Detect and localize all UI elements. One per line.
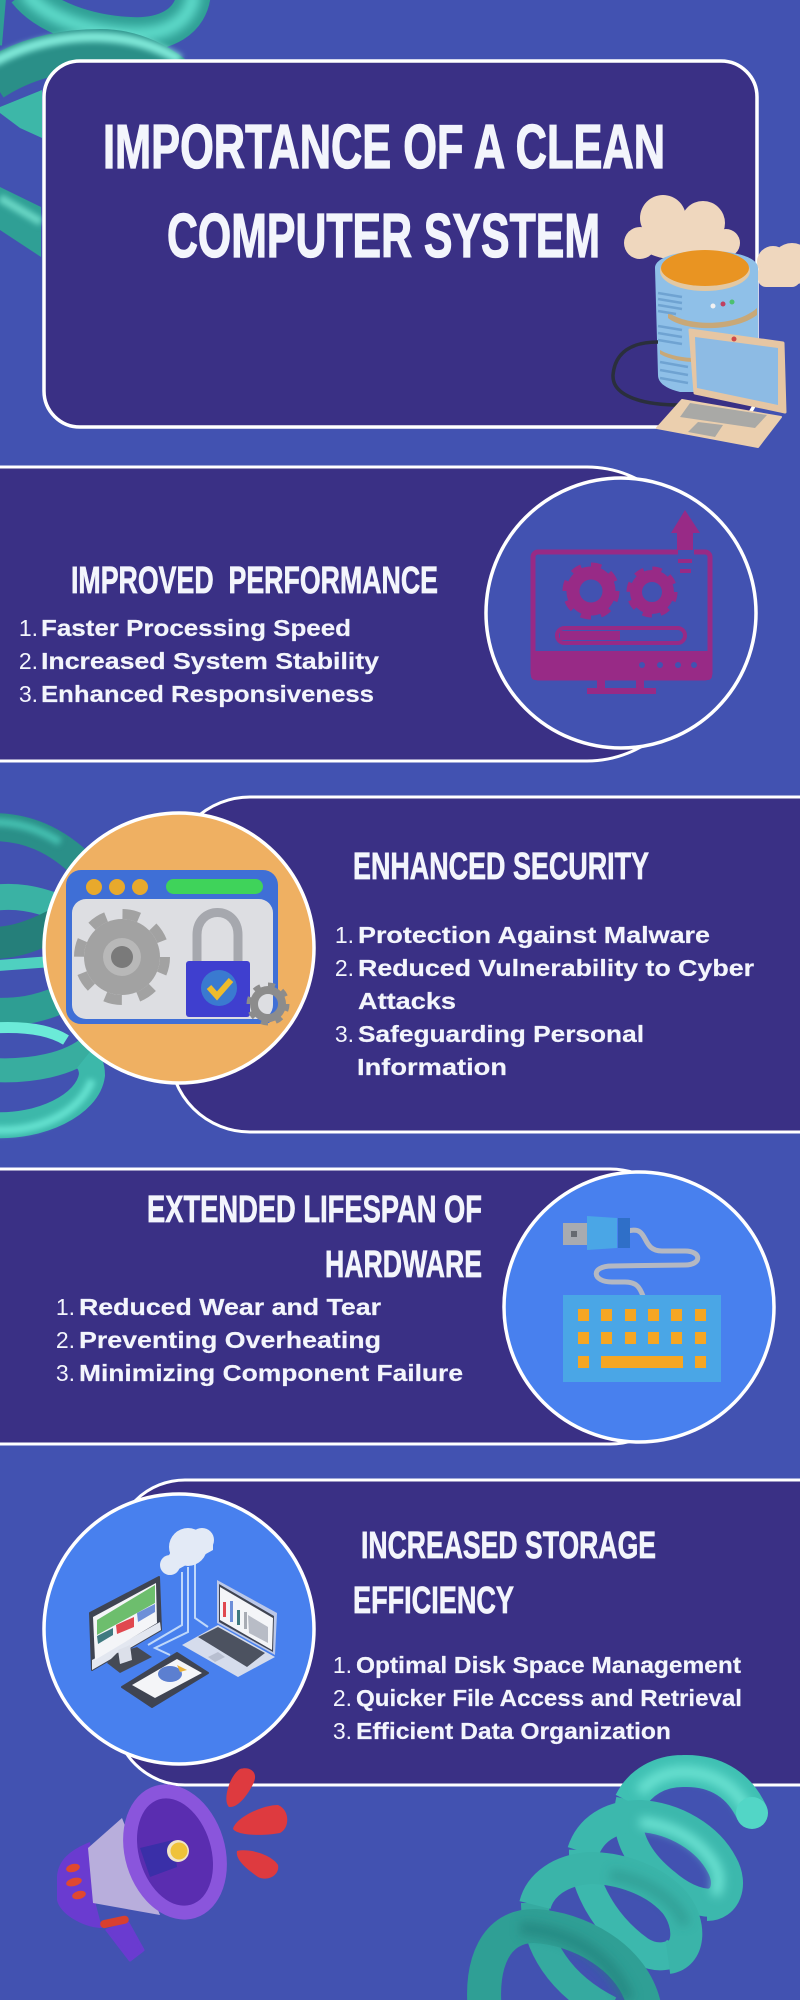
icon: cloud server and laptop: [613, 195, 800, 447]
list: security benefits: [335, 922, 754, 1080]
circle: hardware icon: [504, 1172, 774, 1442]
icon: connected devices: [90, 1528, 277, 1707]
list: storage benefits: 2.: [333, 1685, 352, 1711]
list: security benefits: 2.: [335, 955, 354, 981]
list: security benefits: 1.: [335, 922, 354, 948]
icon: window with gear and padlock: [66, 870, 287, 1024]
list: performance benefits: [19, 615, 379, 707]
laptop: [657, 330, 785, 447]
list: hardware benefits: Minimizing Component Failure: [79, 1360, 463, 1386]
circle: security icon: [44, 813, 314, 1083]
list: hardware benefits: 2.: [56, 1327, 75, 1353]
icon: red sound waves: [226, 1768, 287, 1879]
list: performance benefits: 1.: [19, 615, 38, 641]
title: [103, 113, 665, 271]
list: hardware benefits: Reduced Wear and Tear: [79, 1294, 381, 1320]
list: performance benefits: Faster Processing Speed: [41, 615, 351, 641]
cable: [613, 342, 680, 405]
list: storage benefits: Optimal Disk Space Management: [356, 1652, 741, 1678]
list: hardware benefits: 3.: [56, 1360, 75, 1386]
list: hardware benefits: 1.: [56, 1294, 75, 1320]
list: performance benefits: 3.: [19, 681, 38, 707]
heading: extended lifespan: [147, 1189, 482, 1286]
panel: increased storage: [44, 1480, 800, 1785]
second cloud: [757, 243, 800, 287]
heading: increased storage: EFFICIENCY: [353, 1580, 514, 1622]
list: storage benefits: Efficient Data Organization: [356, 1718, 671, 1744]
list: storage benefits: [333, 1652, 742, 1744]
heading: extended lifespan: HARDWARE: [325, 1244, 482, 1286]
list: security benefits: Safeguarding Personal: [358, 1021, 644, 1047]
icon: monitor with gears: [531, 510, 712, 694]
heading: increased storage: [353, 1525, 656, 1622]
heading: enhanced security: ENHANCED SECURITY: [353, 846, 649, 888]
list: hardware benefits: [56, 1294, 463, 1386]
cloud: [624, 195, 740, 260]
server: [655, 250, 758, 392]
list: security benefits: Reduced Vulnerability to Cyber: [358, 955, 754, 981]
heading: increased storage: INCREASED STORAGE: [361, 1525, 656, 1567]
icon: teal spring left middle: [0, 822, 92, 1130]
list: storage benefits: Quicker File Access and Retrieval: [356, 1685, 742, 1711]
icon: teal spring top left: [0, 0, 200, 257]
panel: improved performance: [0, 467, 756, 761]
title: COMPUTER SYSTEM: [167, 202, 600, 271]
circle: performance icon: [486, 478, 756, 748]
heading: extended lifespan: EXTENDED LIFESPAN OF: [147, 1189, 482, 1231]
panel: extended lifespan: [0, 1169, 774, 1444]
list: security benefits: Protection Against Malware: [358, 922, 710, 948]
list: hardware benefits: Preventing Overheating: [79, 1327, 381, 1353]
icon: teal spring bottom right: [484, 1771, 768, 2000]
panel: enhanced security: [44, 797, 800, 1132]
list: storage benefits: 3.: [333, 1718, 352, 1744]
list: security benefits: 3.: [335, 1021, 354, 1047]
list: storage benefits: 1.: [333, 1652, 352, 1678]
list: performance benefits: 2.: [19, 648, 38, 674]
heading: improved performance: IMPROVED PERFORMANCE: [71, 560, 438, 602]
panel: title: [44, 61, 757, 427]
circle: storage icon: [44, 1494, 314, 1764]
icon: megaphone: [57, 1768, 287, 1960]
icon: usb keyboard: [563, 1216, 721, 1382]
list: security benefits: Attacks: [358, 988, 456, 1014]
list: performance benefits: Increased System Stability: [41, 648, 379, 674]
list: performance benefits: Enhanced Responsiveness: [41, 681, 374, 707]
list: security benefits: Information: [357, 1054, 507, 1080]
